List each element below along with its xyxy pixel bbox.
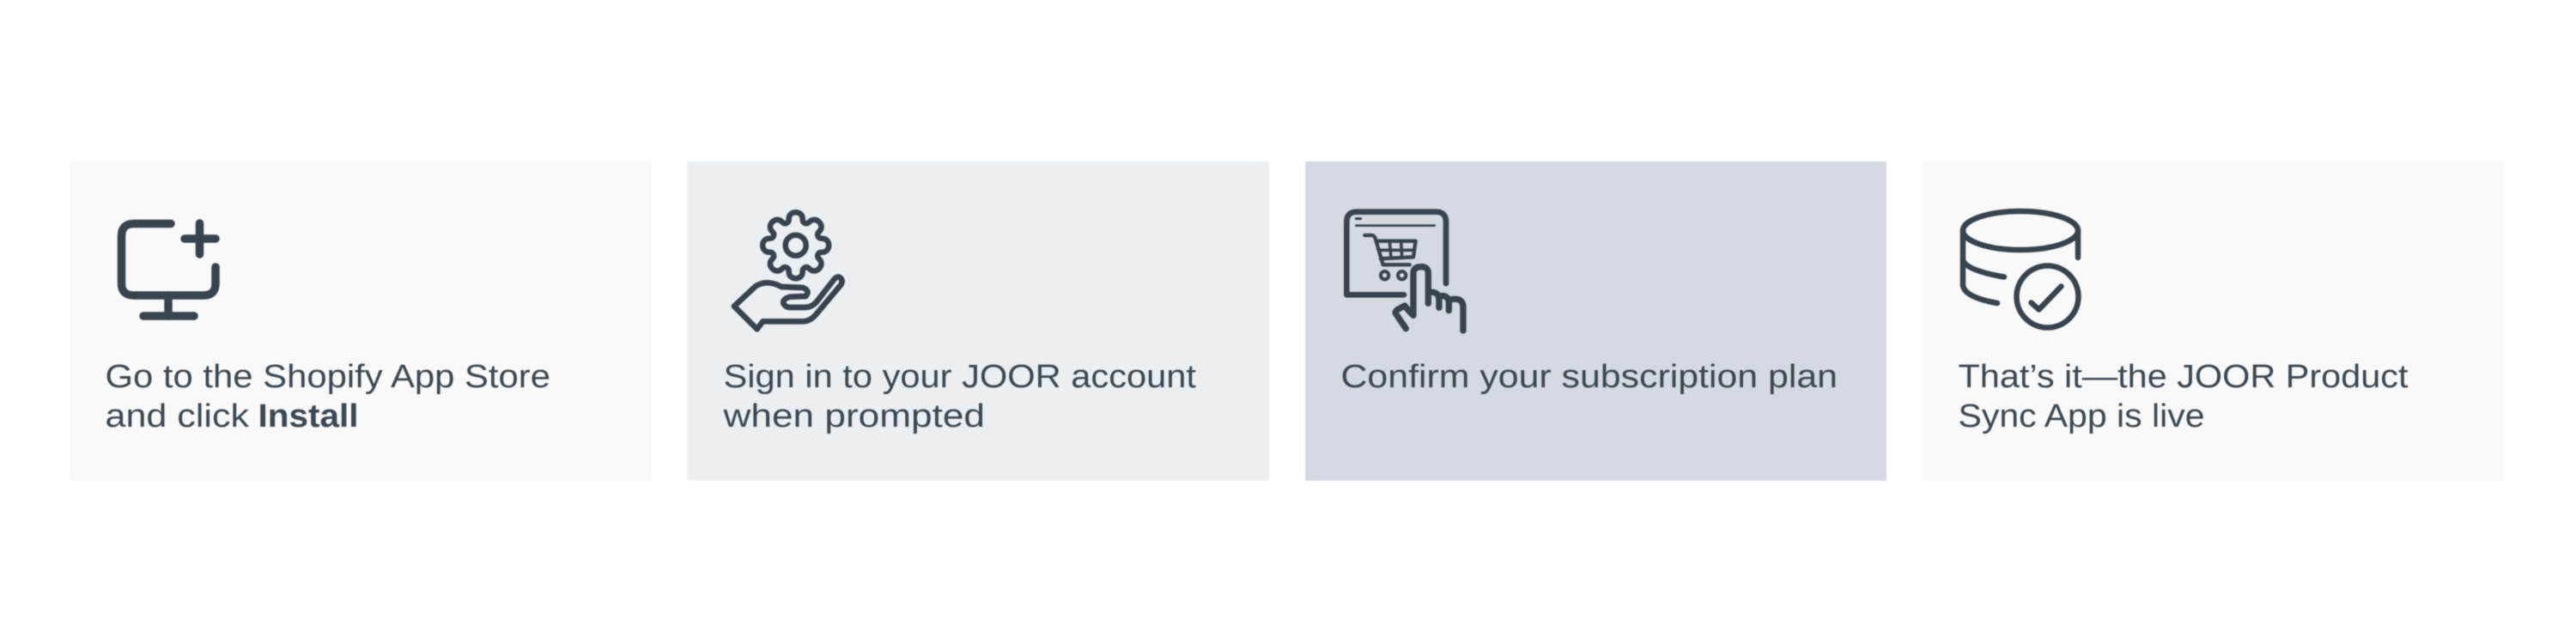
text: step 4: Sync App is live (1958, 398, 2205, 434)
text: step 2: Sign in to your JOOR account (723, 359, 1196, 395)
text: step 2: when prompted (722, 398, 985, 434)
panel: step 3 confirm plan (1305, 161, 1886, 481)
text: step 4: That’s it—the JOOR Product (1958, 359, 2409, 395)
panel background: step 2 (687, 161, 1269, 481)
icon: tablet with cart and pointing hand (1346, 212, 1463, 331)
panel: step 4 app is live (1923, 161, 2505, 481)
icon: monitor with plus (122, 223, 216, 316)
text: step 1 (105, 359, 550, 434)
text: step 4 (1958, 359, 2409, 434)
text: step 1: and click (105, 398, 250, 434)
icon: database with check mark (1963, 211, 2078, 328)
text: step 2 (722, 359, 1196, 434)
icon: hand holding gear (734, 212, 842, 329)
panel background: step 3 (1305, 161, 1886, 481)
panel background: step 4 (1923, 161, 2505, 481)
panel: step 2 sign in (687, 161, 1269, 481)
panel: step 1 install (70, 161, 652, 481)
text: step 1: Go to the Shopify App Store (105, 359, 550, 395)
text: step 3: Confirm your subscription plan (1341, 359, 1838, 395)
panel background: step 1 (70, 161, 652, 481)
text: step 1: Install (258, 398, 359, 434)
